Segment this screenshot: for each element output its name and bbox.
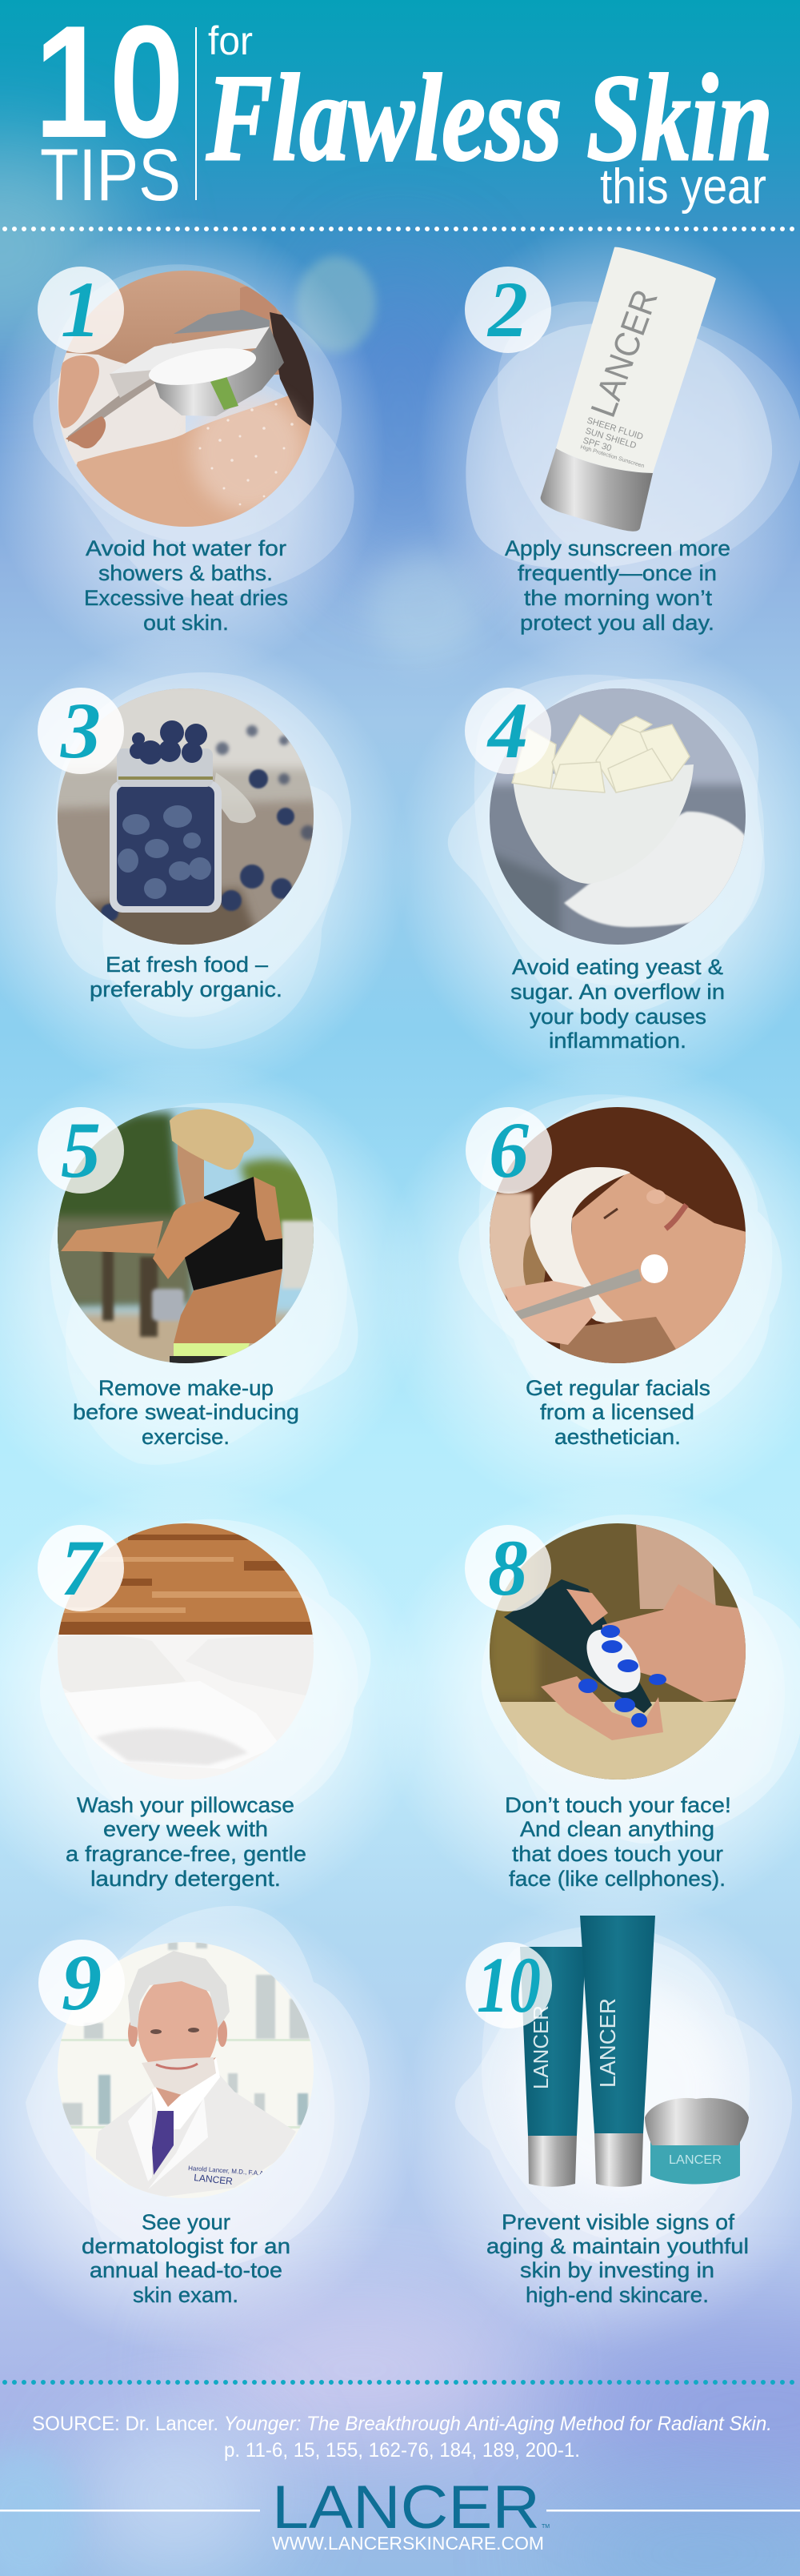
- text tip 2: [505, 536, 730, 635]
- text tip 7: Wash your pillowcase: [77, 1793, 294, 1817]
- text tip 8: that does touch your: [512, 1842, 723, 1866]
- badge 5: [38, 1105, 124, 1194]
- photo: blueberries in jar: [58, 688, 314, 945]
- text tip 6: Get regular facials: [526, 1376, 710, 1400]
- text tip 3: preferably organic.: [90, 977, 282, 1001]
- tip 3: fresh food: [38, 680, 320, 1001]
- text tip 10: aging & maintain youthful: [486, 2234, 749, 2258]
- photo: bed with wood headboard: [58, 1523, 314, 1787]
- badge 6: 6: [489, 1105, 529, 1194]
- badge 1: [38, 265, 124, 354]
- badge 7: 7: [61, 1523, 104, 1612]
- text tip 5: before sweat-inducing: [73, 1400, 299, 1424]
- text tip 10: [486, 2210, 749, 2307]
- jar: nourish: LANCER: [669, 2153, 722, 2167]
- badge 9: 9: [62, 1938, 102, 2027]
- text tip 1: Avoid hot water for: [86, 536, 286, 560]
- text tip 4: sugar. An overflow in: [510, 980, 725, 1004]
- text tip 10: skin by investing in: [520, 2258, 714, 2282]
- badge 5: 5: [61, 1105, 101, 1194]
- text tip 4: Avoid eating yeast &: [512, 955, 723, 979]
- jar: nourish: [645, 2098, 749, 2184]
- photo: sunscreen tube: High Protection Sunscreen: [579, 444, 645, 469]
- tip 4: sugar: [465, 680, 756, 1053]
- text tip 1: Excessive heat dries: [84, 586, 288, 610]
- photo: sunscreen tube: SPF 30: [582, 435, 613, 454]
- photo: facial treatment: [484, 1107, 752, 1369]
- text tip 10: Prevent visible signs of: [502, 2210, 735, 2234]
- text tip 9: [82, 2210, 290, 2307]
- photo: doctor portrait: Harold Lancer, M.D., F.A.A.D.: [188, 2165, 272, 2177]
- text tip 6: aesthetician.: [554, 1425, 681, 1449]
- text tip 8: And clean anything: [520, 1817, 714, 1841]
- tube: polish: LANCER: [529, 2005, 553, 2089]
- title word: for: for: [208, 18, 253, 63]
- text tip 5: [73, 1376, 299, 1449]
- title word: TIPS: TIPS: [40, 134, 181, 216]
- badge 3: 3: [60, 686, 101, 775]
- text tip 8: face (like cellphones).: [509, 1867, 726, 1891]
- text tip 6: [526, 1376, 710, 1449]
- bottom dotted divider: [5, 2380, 800, 2385]
- photo: Lancer products: [516, 1916, 749, 2193]
- text tip 2: Apply sunscreen more: [505, 536, 730, 560]
- tube: cleanse: [580, 1916, 655, 2187]
- logo: LANCER: LANCER: [272, 2474, 540, 2542]
- text tip 9: See your: [142, 2210, 230, 2234]
- text tip 2: the morning won’t: [524, 586, 713, 610]
- text tip 9: annual head-to-toe: [90, 2258, 282, 2282]
- text tip 6: from a licensed: [540, 1400, 694, 1424]
- text tip 2: protect you all day.: [520, 611, 714, 635]
- text tip 7: every week with: [103, 1817, 268, 1841]
- badge 1: 1: [61, 265, 101, 354]
- photo: woman stretching outdoors: [48, 1107, 322, 1369]
- source citation: p. 11-6, 15, 155, 162-76, 184, 189, 200-1.: [224, 2439, 580, 2462]
- text tip 9: dermatologist for an: [82, 2234, 290, 2258]
- tip 9: dermatologist: [38, 1938, 314, 2307]
- badge 8: 8: [488, 1523, 528, 1612]
- text tip 1: [84, 536, 288, 635]
- text tip 10: high-end skincare.: [526, 2283, 709, 2307]
- badge 2: [465, 265, 551, 354]
- text tip 1: out skin.: [143, 611, 229, 635]
- organic white blobs behind tips: [26, 264, 800, 2279]
- tip 8: do not touch face: [465, 1521, 752, 1891]
- text tip 5: Remove make-up: [98, 1376, 274, 1400]
- title words: this year: this year: [600, 159, 766, 215]
- source citation: SOURCE: Dr. Lancer. Younger: The Breakthrough Anti-Aging Method for Radiant Skin.: [32, 2413, 772, 2435]
- photo: sunscreen tube: SHEER FLUID: [586, 415, 644, 442]
- badge 9: [38, 1938, 125, 2027]
- text tip 4: [510, 955, 725, 1053]
- photo: doctor portrait: LANCER: [194, 2172, 234, 2187]
- tube: polish: [520, 1947, 586, 2187]
- trademark: TM: [542, 2524, 550, 2530]
- tip 6: facials: [466, 1105, 752, 1449]
- website URL: WWW.LANCERSKINCARE.COM: [272, 2533, 544, 2554]
- text tip 1: showers & baths.: [98, 561, 273, 585]
- photo: sunscreen tube: [541, 247, 716, 532]
- badge 7: [38, 1523, 124, 1612]
- badge 4: [465, 686, 551, 775]
- badge 4: 4: [486, 686, 528, 775]
- tip 2: sunscreen: [465, 247, 730, 635]
- tip 5: exercise: [38, 1105, 322, 1449]
- text tip 3: [90, 953, 282, 1001]
- photo: shower: [58, 271, 320, 528]
- photo: doctor portrait: [58, 1942, 314, 2199]
- photo: cleaning a phone: [490, 1521, 752, 1785]
- tip 1: avoid hot water: [38, 265, 320, 635]
- text tip 2: frequently—once in: [518, 561, 717, 585]
- title: [34, 0, 773, 216]
- badge 3: [38, 686, 124, 775]
- text tip 8: Don’t touch your face!: [505, 1793, 731, 1817]
- badge 6: [466, 1105, 552, 1194]
- text tip 9: skin exam.: [133, 2283, 238, 2307]
- text tip 4: your body causes: [530, 1005, 706, 1029]
- text tip 3: Eat fresh food –: [106, 953, 268, 977]
- text tip 5: exercise.: [142, 1425, 230, 1449]
- tip 7: pillowcase: [38, 1523, 314, 1891]
- text tip 8: [505, 1793, 731, 1891]
- photo: sunscreen tube: LANCER: [583, 285, 666, 422]
- badge 2: 2: [486, 265, 528, 354]
- text tip 7: laundry detergent.: [90, 1867, 281, 1891]
- photo: sunscreen tube: SUN SHIELD: [584, 426, 638, 451]
- text tip 4: inflammation.: [549, 1029, 686, 1053]
- tip 10: skincare products: [466, 1916, 749, 2307]
- top dotted divider: [5, 227, 800, 231]
- source citation: [32, 2413, 772, 2462]
- badge 10: 10: [477, 1940, 541, 2029]
- footer logo: [0, 2474, 800, 2554]
- title divider: [195, 27, 197, 200]
- badge 8: [465, 1523, 551, 1612]
- text tip 7: [66, 1793, 306, 1891]
- tube: cleanse: LANCER: [595, 1998, 620, 2088]
- text tip 7: a fragrance-free, gentle: [66, 1842, 306, 1866]
- photo: sugar bowl: [490, 688, 746, 945]
